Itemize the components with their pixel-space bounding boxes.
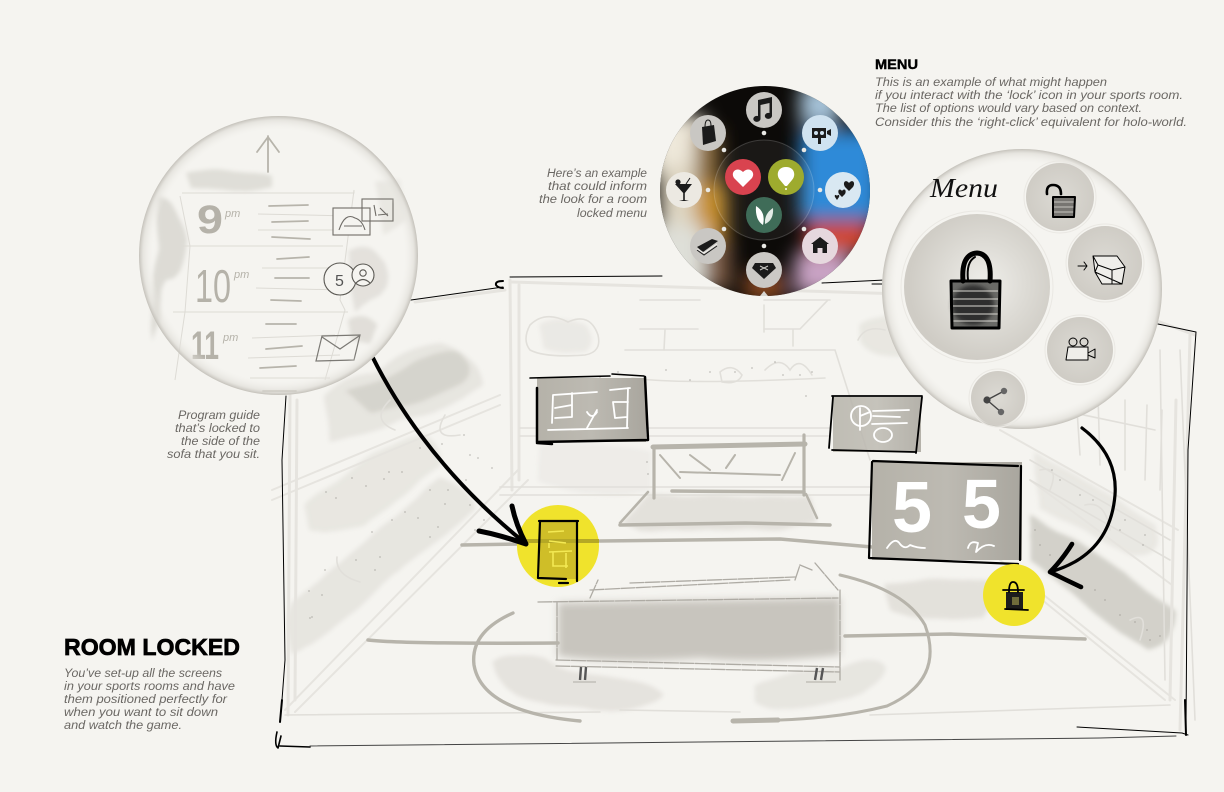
tv stand (620, 435, 830, 525)
schedule hours: pm (233, 269, 249, 281)
screen: small info (829, 396, 922, 453)
envelope (316, 335, 360, 361)
text: room locked description: them positioned perfectly for (64, 694, 228, 706)
speckle dots (309, 362, 1160, 640)
text: room locked description: and watch the game. (64, 720, 182, 732)
text: room locked description: You’ve set-up all the screens (64, 668, 222, 680)
yellow highlight: lock icon (983, 564, 1045, 626)
favorite: heart (725, 159, 761, 195)
text: room locked description: when you want to sit down (64, 707, 218, 719)
lock button (901, 211, 1053, 363)
send to cube button (1066, 224, 1144, 302)
panel: program guide lens (139, 116, 418, 395)
text: program guide note: the side of the (181, 436, 260, 448)
heading: menu: MENU (875, 56, 918, 72)
icon: home (802, 228, 838, 264)
text: menu description: The list of options would vary based on context. (875, 103, 1142, 115)
camera button (1045, 315, 1115, 385)
floor lines (368, 539, 1085, 643)
photo thumbnails (333, 199, 393, 235)
room outline ink (276, 276, 1196, 748)
text: room locked description: in your sports rooms and have (64, 681, 235, 693)
text: program guide note: Program guide (178, 410, 260, 422)
text: menu description: Consider this the ‘right-click’ equivalent for holo-world. (875, 117, 1187, 129)
up arrow (257, 136, 279, 172)
schedule hours (191, 198, 249, 368)
schedule hours: 10 (195, 260, 231, 312)
icon: diamond badge (746, 252, 782, 296)
icon: book (690, 228, 726, 264)
favorite: balloon (768, 159, 804, 195)
schedule hours: pm (224, 208, 240, 220)
icon: hearts (825, 172, 861, 208)
icon: shopping bag (690, 115, 726, 151)
arrow: menu to lock (1050, 428, 1115, 587)
score and contact badges (324, 263, 374, 295)
text: menu description (875, 77, 1187, 129)
inner ring (714, 140, 814, 240)
yellow highlight: program guide on sofa (517, 505, 599, 587)
panel: right click menu lens (882, 149, 1162, 429)
text: menu description: if you interact with the ‘lock’ icon in your sports room. (875, 90, 1183, 102)
score and contact badges: 5 (335, 273, 344, 290)
text: radial menu note: Here’s an example (547, 168, 647, 180)
unlock button (1024, 161, 1096, 233)
score digits: 5 (892, 468, 932, 548)
arrow: guide to sofa (372, 356, 526, 544)
rug oval (474, 575, 930, 721)
guide washes (152, 171, 406, 345)
schedule hours: pm (222, 332, 238, 344)
screen: field diagram (530, 374, 648, 444)
room perspective lines (272, 280, 1195, 730)
text: menu description: This is an example of what might happen (875, 77, 1107, 89)
schedule hours: 9 (197, 198, 223, 242)
icon: cocktail (666, 172, 702, 208)
text: program guide note: that’s locked to (175, 423, 261, 435)
guide grid lines (173, 190, 354, 380)
room sketch (272, 276, 1196, 748)
text: radial menu note: the look for a room (539, 194, 647, 206)
sofa (538, 563, 840, 682)
screen: score 55: 5 (962, 465, 1001, 543)
screen: score 55 (869, 461, 1022, 564)
program text strokes (260, 205, 310, 391)
blurred photo background (660, 88, 870, 296)
wash blobs on walls (288, 317, 1175, 710)
text: program guide note: sofa that you sit. (167, 449, 260, 461)
favorite: leaves (746, 197, 782, 233)
menu handwriting: Menu (929, 173, 998, 203)
text: program guide note (167, 410, 261, 461)
text: radial menu note (539, 168, 648, 220)
share button (969, 369, 1027, 427)
icon: music (746, 92, 782, 128)
text: room locked description (64, 668, 235, 732)
text: radial menu note: locked menu (577, 208, 648, 220)
text: radial menu note: that could inform (548, 181, 647, 193)
ring dots (706, 131, 822, 248)
schedule hours: 11 (191, 324, 219, 368)
panel: example radial menu (660, 86, 870, 296)
heading: room locked: ROOM LOCKED (64, 634, 240, 660)
icon: movie camera (802, 115, 838, 151)
